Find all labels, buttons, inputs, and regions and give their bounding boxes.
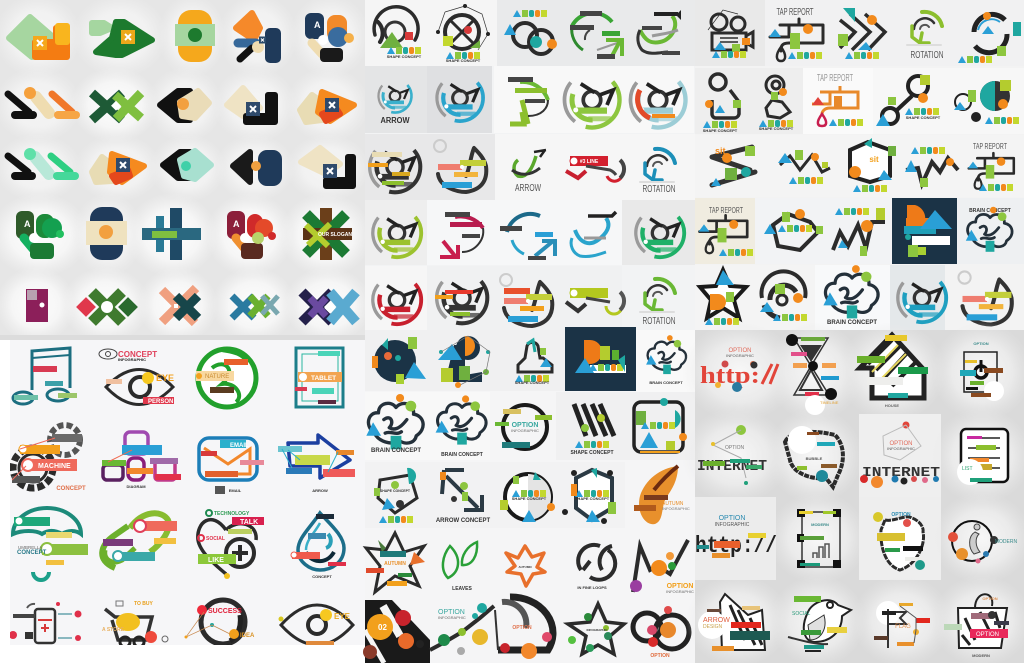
icon: umbrella: CONCEPT [17, 550, 47, 556]
icon: green crosses [92, 93, 141, 120]
icon: house sketch [857, 335, 928, 408]
icon: http red: OPTION [728, 348, 752, 354]
icon: zigzag with triangle [778, 150, 830, 184]
icon: navy orange blue badge [305, 13, 354, 62]
icon: brain concept [966, 207, 1012, 252]
icon: green ring tags two [626, 199, 694, 267]
panel: gradient arrow and cross badges [0, 0, 372, 343]
icon: maroon red badge: A [233, 219, 240, 229]
icon: brain concept large [823, 265, 878, 326]
icon: vision eye: INFOGRAPHIC [118, 357, 146, 362]
icon: navy beige rounded badge [86, 207, 127, 260]
icon: blue green crosses [232, 296, 278, 318]
icon: shape concept ring: SHAPE CONCEPT [512, 496, 547, 501]
icon: http red: http: [700, 363, 760, 389]
icon: http dark [695, 515, 777, 559]
icon: power button doc [960, 341, 1004, 401]
icon: tap report [769, 7, 823, 61]
icon: dark X with orange circles [363, 600, 430, 663]
icon: success magnifier [184, 600, 255, 660]
icon: rotation green arrow: ROTATION [910, 50, 944, 61]
icon: arrow sketch [698, 594, 770, 651]
panel: shape concept icons, upper right [695, 0, 1024, 332]
icon: tap report red: TAP REPORT [817, 73, 853, 84]
icon: concentric ring [760, 271, 807, 321]
icon: arrow with tags [278, 435, 355, 493]
icon: dark circle shapes [372, 337, 426, 384]
icon: person outline shape [515, 340, 552, 385]
icon: star shape [700, 270, 746, 325]
icon: sit diagonal bars [711, 146, 755, 186]
icon: autumn maple leaf [506, 546, 545, 586]
icon: frame bar chart [797, 509, 841, 568]
icon: internet sketch: INTERNET [697, 458, 767, 475]
icon: brain with diamond [646, 335, 686, 385]
icon: two arrows ring [958, 12, 1021, 63]
icon: info circle [948, 521, 1017, 564]
icon: water drop: CONCEPT [312, 574, 332, 579]
icon: zigzag orange [833, 208, 885, 256]
icon: house sketch: HOUSE [885, 403, 899, 408]
icon: shield sketch: OPTION [891, 512, 911, 518]
icon: rotation green: ROTATION [642, 316, 676, 327]
icon: slogan cross [303, 208, 352, 260]
icon: zigzag up [905, 147, 958, 187]
icon: option zigzag: INFOGRAPHIC [666, 589, 694, 594]
icon: green hand badge: A [24, 219, 31, 229]
icon: chain links [102, 513, 177, 568]
icon: rings with blocks [876, 75, 941, 126]
icon: internet with nodes: INTERNET [862, 465, 940, 481]
icon: arrow s-curve [512, 150, 546, 194]
icon: frame bar chart: MODERN [811, 522, 829, 527]
icon: brain sideways: BRAIN CONCEPT [441, 452, 483, 458]
panel: colorful tagged line icons, lower left [0, 335, 365, 663]
icon: heart social: TALK [240, 519, 258, 526]
icon: list document: LIST [962, 466, 973, 472]
icon: shape concept arc: SHAPE CONCEPT [387, 54, 422, 59]
icon: internet sketch: OPTION [725, 445, 745, 451]
icon: speech bubble sketch: BUBBLE [806, 456, 823, 461]
icon: option ring: OPTION [512, 422, 538, 429]
icon: beige black arrow [227, 88, 275, 122]
panel: dark line shape icons, lower middle [363, 327, 695, 663]
icon: power button doc: OPTION [973, 341, 989, 346]
icon: umbrella: UMBRELLA [18, 545, 42, 550]
icon: arrow with tags: ARROW [312, 488, 328, 493]
icon: lime line tags [566, 288, 624, 314]
icon: vision eye: EYE [156, 373, 174, 383]
icon: gears machine [12, 425, 86, 492]
icon: person outline shape: SHAPE CONCEPT [515, 380, 550, 385]
icon: node line option: INFOGRAPHIC [438, 615, 466, 620]
icon: maroon red badge [227, 211, 276, 259]
icon: chevrons [838, 8, 885, 59]
icon: red ring tags [363, 266, 431, 334]
icon: dark square shapes [892, 198, 957, 264]
icon: bird sketch [788, 596, 851, 652]
icon: shopping bag sketch: OPTION [976, 632, 999, 638]
icon: yin yang shapes [954, 80, 1019, 124]
icon: tap report green [968, 142, 1014, 191]
icon: gears machine: CONCEPT [56, 486, 86, 492]
icon: shopping cart [102, 601, 168, 647]
icon: black mint arrows [8, 148, 75, 176]
icon: black arc option [495, 597, 553, 659]
icon: salmon teal cross [162, 288, 198, 323]
icon: brain sideways [436, 395, 486, 458]
icon: http red: INFOGRAPHIC [726, 353, 754, 358]
icon: info circle: MODERN [995, 539, 1017, 545]
icon: star with tags: AUTUMN [384, 561, 406, 567]
icon: ring and house outline [703, 74, 741, 133]
icon: list document [957, 429, 1008, 485]
icon: speech bubble sketch [785, 426, 843, 487]
icon: gears machine: MACHINE [38, 463, 71, 470]
icon: teal ring [888, 264, 956, 332]
icon: multicolor ring tags [619, 61, 697, 139]
icon: dark ring tags two [426, 262, 498, 334]
icon: arrow sketch: DESIGN [703, 624, 723, 630]
icon: slogan cross: OUR SLOGAN [318, 232, 352, 238]
icon: shopping cart: TO BUY [134, 601, 153, 607]
icon: shopping bag sketch: OPTION [982, 596, 998, 601]
icon: blue s-arrow [571, 212, 616, 257]
icon: brain concept row [366, 394, 423, 454]
icon: arrow s-curve: ARROW [515, 183, 541, 194]
icon: tablet: TABLET [311, 375, 336, 382]
icon: black beige leaf [160, 91, 209, 120]
icon: heart social: TECHNOLOGY [214, 511, 250, 517]
icon: http dark: INFOGRAPHIC [715, 522, 750, 528]
icon: hourglass: TIMELINE [820, 400, 839, 405]
icon: small arrow ring: ARROW [380, 116, 410, 125]
icon: umbrella [13, 508, 88, 580]
icon: green line s-arrow [638, 10, 681, 55]
icon: hexagon shape concept: SHAPE CONCEPT [575, 496, 610, 501]
icon: autumn maple leaf: AUTUMN [518, 565, 532, 569]
icon: pentagon shapes [374, 468, 417, 523]
icon: rings with blocks: SHAPE CONCEPT [906, 115, 941, 120]
icon: rotation green [640, 279, 676, 327]
panel: sketch-style stickers, lower right [682, 322, 1024, 663]
icon: dark ring orange tags [359, 131, 431, 203]
icon: green orange arrow badge [9, 17, 67, 57]
icon: option zigzag: OPTION [667, 583, 693, 590]
icon: rotation green arrow [907, 12, 944, 61]
icon: block scheme [102, 432, 181, 489]
icon: autumn leaf: INFOGRAPHIC [662, 506, 690, 511]
icon: teal ring tags [427, 65, 493, 131]
icon: flag: FLAG [895, 624, 911, 630]
icon: water drop [291, 513, 346, 579]
icon: tap report cream: TAP REPORT [709, 206, 743, 215]
icon: shopping bag sketch [944, 594, 1009, 658]
icon: internet sketch [697, 425, 767, 485]
icon: shape concept ring [500, 472, 555, 522]
icon: tablet [295, 348, 343, 407]
icon: leaves [443, 542, 477, 592]
icon: tap report red [812, 73, 863, 126]
icon: rotation blue [640, 149, 676, 195]
icon: arrow concept: ARROW CONCEPT [436, 518, 490, 524]
icon: beige black arrow two [301, 148, 353, 186]
icon: teardrop orange tags [500, 274, 552, 326]
icon: hexagon shape concept [562, 468, 616, 524]
icon: red line tags [566, 156, 624, 181]
icon: interlocked rings [577, 545, 615, 590]
icon: blue cross [142, 208, 201, 260]
icon: brain concept: BRAIN CONCEPT [969, 208, 1011, 214]
icon: tap report cream [699, 206, 753, 256]
icon: purple blue cross [302, 292, 356, 322]
icon: black mint leaf [163, 151, 211, 179]
icon: green triangle badge [92, 22, 152, 55]
icon: brain with diamond: BRAIN CONCEPT [649, 380, 683, 385]
icon: email envelope [199, 438, 264, 494]
icon: star with tags [366, 533, 425, 592]
icon: ring and house outline: SHAPE CONCEPT [703, 128, 738, 133]
icon: success magnifier: SUCCESS [208, 608, 242, 615]
icon: film camera [708, 10, 753, 58]
icon: http dark: OPTION [719, 515, 745, 522]
icon: http red [700, 348, 778, 392]
icon: black star nodes [568, 604, 624, 654]
icon: red line tags: #3 LINE [580, 159, 599, 165]
icon: hexagon orange [764, 209, 823, 250]
icon: vision eye [99, 349, 174, 405]
icon: shield sketch [873, 512, 925, 570]
icon: music note [13, 348, 77, 404]
icon: brain concept large: BRAIN CONCEPT [827, 320, 877, 326]
icon: node line option [430, 603, 494, 655]
icon: internet with nodes: INFOGRAPHIC [887, 446, 915, 451]
icon: teardrop lime [958, 271, 1012, 324]
icon: black arc option: OPTION [512, 625, 532, 631]
icon: beige orange triangle [300, 92, 354, 122]
icon: green line arrow two [508, 77, 548, 124]
icon: diagonal stripes [570, 404, 614, 456]
icon: green hand badge [16, 211, 64, 259]
icon: small arrow ring [372, 73, 418, 125]
icon: black star nodes: INFOGRAPHIC [586, 628, 608, 632]
icon: vision eye: CONCEPT [118, 350, 157, 359]
icon: internet with nodes [860, 422, 940, 488]
icon: black orange arrows [8, 87, 76, 115]
icon: gear network [436, 4, 490, 63]
icon: shape concept arc [374, 7, 422, 59]
icon: dark square abcde [565, 327, 636, 391]
icon: sit diagonal bars: sit [715, 146, 726, 156]
icon: heart social [198, 510, 264, 579]
icon: option ring [495, 405, 552, 449]
icon: magenta tile [26, 289, 48, 322]
icon: tap report: TAP REPORT [776, 7, 814, 18]
icon: autumn leaf: AUTUMN [662, 501, 684, 507]
icon: teardrop with tags [434, 140, 486, 192]
icon: pentagon shapes: SHAPE CONCEPT [380, 489, 411, 493]
icon: rotation blue: ROTATION [642, 184, 676, 195]
panel: line icons with tags, upper middle [359, 0, 697, 334]
icon: eye lower [278, 605, 353, 645]
icon: arrow concept [436, 470, 490, 524]
icon: lime ring tags [363, 199, 431, 267]
icon: brain concept row: BRAIN CONCEPT [371, 448, 421, 454]
icon: infinity ring option [633, 606, 689, 659]
icon: hexagon sit: sit [869, 155, 879, 164]
icon: leaves: LEAVES [452, 586, 472, 592]
icon: autumn leaf [634, 466, 690, 524]
icon: success magnifier: IDEA [240, 633, 255, 639]
icon: crimson line arrow [440, 212, 483, 257]
icon: email envelope: EMAIL [229, 488, 242, 493]
icon: hourglass [786, 334, 839, 415]
icon: dark X with orange circles: 02 [378, 623, 387, 632]
icon: shopping cart: A STORE [102, 627, 125, 633]
icon: interlocked rings: IN FINE LOOPS [577, 585, 607, 590]
icon: mobile phone [9, 602, 82, 643]
icon: email envelope: EMAIL [230, 443, 249, 449]
icon: beige orange triangle two [92, 154, 144, 182]
icon: bird sketch: SOCIAL [792, 611, 811, 617]
icon: node line option: OPTION [438, 609, 465, 616]
icon: infinity ring option: OPTION [650, 653, 670, 659]
icon: orange green rounded badge [175, 10, 215, 62]
icon: option ring: INFOGRAPHIC [511, 428, 539, 433]
icon: orange navy badge [236, 13, 281, 63]
icon: internet with nodes: OPTION [889, 441, 913, 447]
icon: gear network: SHAPE CONCEPT [446, 58, 481, 63]
icon: heart social: SOCIAL [206, 536, 225, 542]
icon: http dark: http:// [695, 533, 777, 559]
icon: rounded square shapes [634, 398, 687, 452]
icon: navy orange blue badge: A [314, 20, 321, 30]
icon: option zigzag [630, 540, 694, 594]
icon: eye lower: EYE [334, 612, 351, 621]
icon: chain outline: SHAPE CONCEPT [759, 126, 794, 131]
icon: tap report green: TAP REPORT [973, 142, 1007, 151]
icon: black navy arrow [233, 150, 282, 186]
icon: block scheme: DIAGRAM [126, 484, 146, 489]
icon: diagonal stripes: SHAPE CONCEPT [570, 450, 614, 456]
icon: green red cross [76, 292, 138, 322]
icon: arrow sketch: ARROW [703, 617, 730, 624]
icon: green ring tags [553, 61, 631, 139]
icon: chain outline [759, 76, 794, 131]
icon: blue line arrow [500, 214, 555, 260]
icon: dark blob with triangle [438, 336, 490, 388]
icon: hexagon sit [849, 138, 896, 192]
icon: vision eye: PERSON [148, 399, 173, 405]
icon: flag [874, 601, 930, 648]
icon: nature globe: NATURE [205, 374, 229, 380]
icon: nature globe [196, 349, 256, 407]
icon: linked rings [504, 10, 557, 54]
icon: heart social: LIKE [208, 557, 224, 564]
icon: green line arrow [570, 11, 622, 59]
icon: shopping bag sketch: MODERN [972, 653, 990, 658]
